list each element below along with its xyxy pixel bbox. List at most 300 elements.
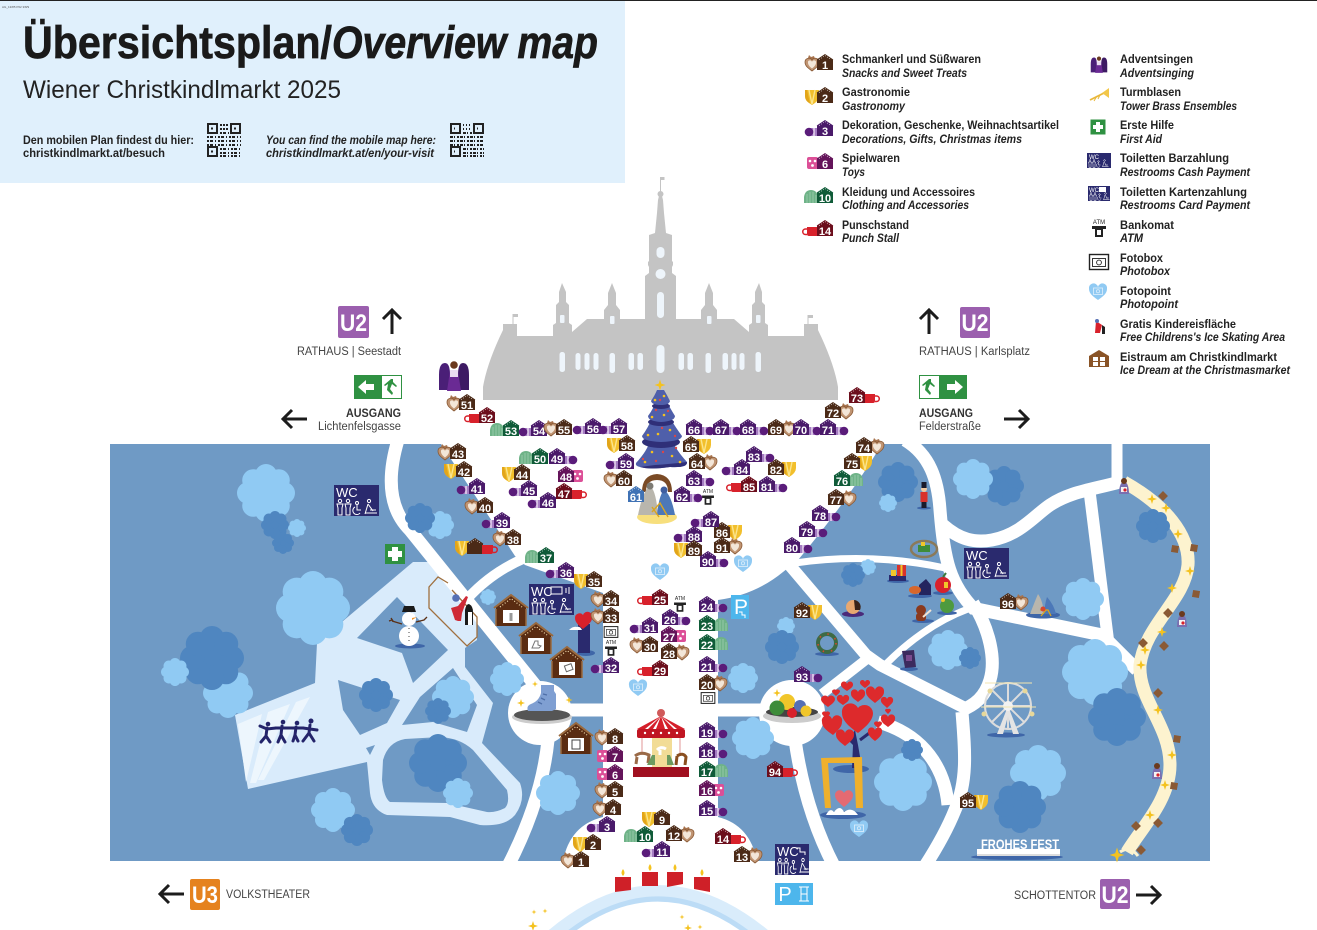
skaters silhouette bbox=[260, 718, 317, 742]
stall 37: 37 bbox=[540, 553, 552, 565]
stall 31: 31 bbox=[644, 623, 656, 635]
stall 51 bbox=[447, 394, 476, 412]
stall 13: 13 bbox=[736, 852, 748, 864]
stall 59: 59 bbox=[620, 459, 632, 471]
legend: services text: Adventsinging bbox=[1119, 68, 1194, 80]
stall 90: 90 bbox=[702, 557, 714, 569]
stars under arch bbox=[528, 908, 702, 930]
U2 right with direction bbox=[919, 307, 1030, 358]
legend: services text: Restrooms Card Payment bbox=[1120, 200, 1251, 212]
stall 34 bbox=[591, 590, 620, 608]
stall 36: 36 bbox=[560, 568, 572, 580]
teddy bear bbox=[912, 605, 934, 623]
stall 13 bbox=[733, 846, 762, 864]
Frohes Fest sign: FROHES FEST bbox=[981, 836, 1059, 852]
stall 83: 83 bbox=[748, 452, 760, 464]
exit right bbox=[919, 375, 1028, 433]
heart photo frame bbox=[820, 757, 866, 819]
stall 7 bbox=[597, 746, 624, 764]
stall 40: 40 bbox=[479, 503, 491, 515]
stall 84 bbox=[722, 459, 751, 477]
stall 94: 94 bbox=[769, 767, 782, 779]
legend: services text: Turmblasen bbox=[1120, 87, 1181, 99]
U2 Schottentor bottom right: SCHOTTENTOR bbox=[1014, 890, 1096, 902]
stall 52: 52 bbox=[481, 413, 493, 425]
light trail bbox=[1110, 478, 1200, 862]
WC sign right: WC bbox=[966, 548, 988, 563]
legend: category icons: 3 bbox=[822, 126, 828, 138]
stall 24 bbox=[698, 596, 727, 614]
icon: atm bbox=[1092, 220, 1106, 237]
stall 46: 46 bbox=[542, 498, 554, 510]
heart tree bbox=[821, 680, 895, 773]
stall 32 bbox=[591, 657, 620, 675]
stall 67 bbox=[712, 419, 741, 437]
small map attractions bbox=[815, 482, 1060, 671]
stall 22: 22 bbox=[701, 640, 713, 652]
ornament bowl monument bbox=[763, 689, 821, 723]
U3 Volkstheater bottom left bbox=[160, 879, 310, 910]
ice and snow area bbox=[235, 562, 522, 825]
title: Übersichtsplan/ bbox=[23, 17, 332, 68]
legend: service icons bbox=[1087, 57, 1111, 367]
green ornament bbox=[937, 598, 957, 615]
stall 33: 33 bbox=[605, 613, 617, 625]
stall 60 bbox=[604, 470, 633, 488]
wreath bbox=[815, 634, 839, 656]
stall 73: 73 bbox=[851, 393, 863, 405]
toy house bbox=[908, 579, 932, 598]
stall 81: 81 bbox=[761, 482, 773, 494]
stall 34: 34 bbox=[605, 596, 618, 608]
stall 73 bbox=[848, 387, 879, 405]
WC sign left bbox=[334, 485, 379, 516]
stall 71: 71 bbox=[822, 425, 834, 437]
heart on pillar bbox=[569, 612, 595, 656]
WC sign bottom bbox=[775, 844, 809, 875]
skate monument bbox=[512, 681, 572, 724]
stall 57 bbox=[599, 418, 628, 436]
city hall silhouette bbox=[483, 177, 838, 400]
stall 68 bbox=[739, 419, 768, 437]
exit left: AUSGANG bbox=[346, 406, 401, 420]
stall 5 bbox=[595, 781, 624, 799]
icon: kids ice area bbox=[1095, 319, 1105, 334]
stall 17: 17 bbox=[701, 767, 713, 779]
stall 11 bbox=[642, 841, 671, 859]
stall 14 bbox=[714, 828, 745, 846]
legend: services text: Toiletten Barzahlung bbox=[1120, 153, 1229, 165]
stall 20 bbox=[698, 674, 727, 692]
stall 28 bbox=[660, 643, 689, 661]
stall 74: 74 bbox=[858, 443, 871, 455]
arrow up bbox=[920, 310, 938, 334]
lawn lower left bbox=[338, 680, 400, 735]
parking stairs sign: P bbox=[734, 596, 748, 619]
ice dream huts bbox=[494, 595, 593, 754]
parking lift sign: P bbox=[778, 884, 792, 906]
stall 64: 64 bbox=[691, 459, 704, 471]
stall 1 bbox=[561, 851, 590, 869]
stall 8: 8 bbox=[612, 734, 618, 746]
legend: services text: Gratis Kindereisfläche bbox=[1120, 319, 1236, 331]
WC sign right bbox=[964, 548, 1009, 579]
ATMs on map: ATM bbox=[675, 596, 685, 602]
stall 66 bbox=[685, 419, 714, 437]
stall 51: 51 bbox=[461, 400, 473, 412]
legend: services text: First Aid bbox=[1120, 134, 1163, 146]
title: Overview map bbox=[332, 17, 598, 68]
kids ice fence with child and penguin bbox=[429, 577, 477, 646]
nutcracker bbox=[917, 482, 931, 510]
stall 69 bbox=[767, 419, 796, 437]
snowman bbox=[389, 606, 427, 648]
legend: category icons: 14 bbox=[819, 226, 832, 238]
U3 Volkstheater bottom left: VOLKSTHEATER bbox=[226, 889, 310, 901]
stall 37 bbox=[525, 547, 555, 565]
ATMs on map: ATM bbox=[703, 489, 713, 495]
stall 30 bbox=[630, 636, 659, 654]
icon: ice dream hut bbox=[1089, 350, 1109, 367]
legend: services text: Photobox bbox=[1120, 266, 1171, 278]
arrow up bbox=[383, 310, 401, 334]
stall 78: 78 bbox=[814, 511, 826, 523]
stall 71 bbox=[819, 419, 848, 437]
legend: stall categories: Spielwaren bbox=[842, 153, 900, 165]
stall 94 bbox=[766, 761, 797, 779]
stall 66: 66 bbox=[688, 425, 700, 437]
U2 right with direction: U2 bbox=[962, 310, 988, 337]
legend: category icons: 6 bbox=[822, 159, 828, 171]
stall 29 bbox=[638, 660, 669, 678]
white paths bbox=[391, 440, 1137, 866]
stall 50 bbox=[519, 448, 549, 466]
stall 55: 55 bbox=[558, 425, 570, 437]
stall 24: 24 bbox=[701, 602, 714, 614]
stall 81 bbox=[758, 476, 787, 494]
stall 67: 67 bbox=[715, 425, 727, 437]
stall 23: 23 bbox=[701, 621, 713, 633]
stall 48 bbox=[557, 466, 583, 484]
stall 55 bbox=[544, 419, 573, 437]
stall 80: 80 bbox=[786, 543, 798, 555]
stall 18 bbox=[698, 742, 727, 760]
legend: category icons: 2 bbox=[822, 93, 828, 105]
stall 54 bbox=[519, 420, 548, 438]
stall 36 bbox=[546, 562, 575, 580]
stall 5: 5 bbox=[612, 787, 618, 799]
stall 63: 63 bbox=[688, 476, 700, 488]
stall 18: 18 bbox=[701, 748, 713, 760]
stall 6 bbox=[597, 764, 624, 782]
stall 95 bbox=[959, 792, 988, 810]
market stalls bbox=[438, 387, 1028, 869]
subtitle: Wiener Christkindlmarkt 2025 bbox=[23, 76, 341, 104]
icon: photobox bbox=[1090, 254, 1108, 270]
stall 70 bbox=[792, 419, 821, 437]
stall 62: 62 bbox=[676, 492, 688, 504]
legend: stall categories: Gastronomie bbox=[842, 87, 910, 99]
stall 63 bbox=[685, 470, 714, 488]
English QR caption bbox=[266, 135, 436, 160]
stall 47: 47 bbox=[558, 489, 570, 501]
QR code German bbox=[207, 124, 241, 156]
stall 12 bbox=[665, 825, 694, 843]
stall 47 bbox=[555, 483, 586, 501]
advent candles bbox=[615, 864, 710, 892]
stall 12: 12 bbox=[668, 831, 680, 843]
stall 49: 49 bbox=[551, 454, 563, 466]
exit right: Felderstraße bbox=[919, 421, 981, 433]
stall 14: 14 bbox=[717, 834, 730, 846]
snow arch bbox=[528, 893, 772, 930]
stall 77 bbox=[827, 489, 856, 507]
legend: services text: Photopoint bbox=[1120, 299, 1179, 311]
stall 96 bbox=[999, 593, 1028, 611]
stall 87 bbox=[691, 511, 720, 529]
legend: services text: Erste Hilfe bbox=[1120, 120, 1174, 132]
stall 75 bbox=[843, 453, 872, 471]
stall 43: 43 bbox=[452, 449, 464, 461]
stall 15: 15 bbox=[701, 806, 713, 818]
stall 2 bbox=[573, 834, 602, 852]
title bbox=[23, 17, 598, 68]
legend: stall categories: Decorations, Gifts, Christmas items bbox=[842, 134, 1022, 146]
legend: services text: ATM bbox=[1119, 233, 1143, 245]
icon: restrooms cash: WC bbox=[1089, 155, 1100, 161]
icon: restrooms card bbox=[1088, 186, 1110, 201]
WC sign card block bbox=[529, 584, 574, 615]
stall 41: 41 bbox=[471, 484, 483, 496]
stall 28: 28 bbox=[663, 649, 675, 661]
stall 76: 76 bbox=[836, 476, 848, 488]
stall 42: 42 bbox=[458, 467, 470, 479]
stall 4 bbox=[593, 799, 622, 817]
comet bbox=[1110, 848, 1138, 862]
trees bbox=[161, 459, 1170, 846]
stall 10: 10 bbox=[639, 832, 651, 844]
stall 48: 48 bbox=[560, 472, 572, 484]
stall 10 bbox=[624, 826, 654, 844]
stall 50: 50 bbox=[534, 454, 546, 466]
apple bbox=[933, 573, 953, 595]
legend: services text: Eistraum am Christkindlmarkt bbox=[1120, 352, 1277, 364]
stall 79 bbox=[798, 521, 827, 539]
German QR caption: Den mobilen Plan findest du hier: bbox=[23, 135, 194, 147]
stall 8 bbox=[595, 728, 624, 746]
exit right: AUSGANG bbox=[919, 406, 973, 420]
stall 26: 26 bbox=[664, 615, 676, 627]
icon: atm: ATM bbox=[1093, 220, 1105, 226]
stall 26 bbox=[661, 609, 690, 627]
English QR caption: christkindlmarkt.at/en/your-visit bbox=[266, 148, 435, 160]
stall 4: 4 bbox=[610, 805, 617, 817]
German QR caption bbox=[23, 135, 194, 160]
skating rink highlights bbox=[238, 697, 310, 783]
arrow left bbox=[283, 410, 307, 428]
U2 left with direction: U2 bbox=[340, 310, 367, 337]
ATMs on map: ATM bbox=[606, 640, 616, 646]
stall 52 bbox=[465, 407, 496, 425]
stall 58: 58 bbox=[621, 441, 633, 453]
stall 56: 56 bbox=[587, 424, 599, 436]
stall 9 bbox=[642, 809, 671, 827]
stall 88: 88 bbox=[688, 532, 700, 544]
stall 23 bbox=[698, 615, 728, 633]
stall 19: 19 bbox=[701, 728, 713, 740]
stall 90 bbox=[699, 551, 728, 569]
photopoints bbox=[629, 555, 868, 837]
stall 21 bbox=[698, 656, 727, 674]
lawn centre bbox=[402, 668, 477, 732]
parking lift sign bbox=[775, 883, 813, 906]
stall 95: 95 bbox=[962, 798, 974, 810]
legend: stall categories: Punch Stall bbox=[842, 233, 900, 245]
stall 84: 84 bbox=[736, 465, 749, 477]
stall 15 bbox=[698, 800, 727, 818]
stall 56 bbox=[573, 418, 602, 436]
legend: services text: Restrooms Cash Payment bbox=[1120, 167, 1251, 179]
stall 93 bbox=[793, 666, 822, 684]
stall 96: 96 bbox=[1002, 599, 1014, 611]
legend: category icons: 10 bbox=[819, 193, 831, 205]
stall 85: 85 bbox=[743, 482, 755, 494]
legend: services text bbox=[1119, 54, 1291, 377]
stall 91: 91 bbox=[716, 543, 728, 555]
stall 49 bbox=[548, 448, 577, 466]
legend: stall categories: Punschstand bbox=[842, 220, 909, 232]
carousel bbox=[633, 709, 689, 777]
stall 30: 30 bbox=[644, 642, 656, 654]
stall nativity bbox=[1026, 594, 1060, 618]
English QR caption: You can find the mobile map here: bbox=[266, 135, 436, 147]
U2 left with direction bbox=[297, 306, 402, 358]
legend: stall categories: Kleidung und Accessoires bbox=[842, 187, 975, 199]
stall 92 bbox=[793, 602, 822, 620]
legend: services text: Fotobox bbox=[1120, 253, 1164, 265]
stall 17 bbox=[698, 761, 728, 779]
stall unnumbered gastro punch bbox=[455, 538, 497, 556]
legend: services text: Toiletten Kartenzahlung bbox=[1120, 187, 1247, 199]
stall 16 bbox=[698, 780, 724, 798]
adventsingen choir bbox=[439, 361, 469, 391]
stall 2: 2 bbox=[590, 840, 596, 852]
stall 75: 75 bbox=[846, 459, 858, 471]
stall 33 bbox=[591, 607, 620, 625]
stall 41 bbox=[457, 478, 486, 496]
legend: stall categories bbox=[842, 54, 1059, 245]
stall 53: 53 bbox=[505, 426, 517, 438]
stall 86 bbox=[713, 522, 742, 540]
stall 77: 77 bbox=[830, 495, 842, 507]
legend: stall categories: Snacks and Sweet Treats bbox=[842, 68, 967, 80]
stall 60: 60 bbox=[618, 476, 630, 488]
stall 39: 39 bbox=[496, 518, 508, 530]
stall 74 bbox=[855, 437, 884, 455]
legend: services text: Ice Dream at the Christmasmarket bbox=[1120, 365, 1291, 377]
book bbox=[900, 650, 918, 671]
nativity scene bbox=[637, 474, 677, 524]
stall 80 bbox=[783, 537, 812, 555]
legend: services text: Adventsingen bbox=[1120, 54, 1193, 66]
stall 57: 57 bbox=[613, 424, 625, 436]
stall 25 bbox=[638, 589, 669, 607]
header panel bbox=[0, 1, 625, 183]
snowman lawn bbox=[357, 597, 448, 683]
stall 1: 1 bbox=[578, 857, 584, 869]
icon: restrooms cash bbox=[1087, 153, 1111, 168]
stall 88 bbox=[674, 526, 703, 544]
German QR caption: christkindlmarkt.at/besuch bbox=[23, 148, 165, 160]
stall 91 bbox=[713, 537, 742, 555]
stall 93: 93 bbox=[796, 672, 808, 684]
stall 72 bbox=[824, 402, 853, 420]
stall 39 bbox=[482, 512, 511, 530]
stall 42 bbox=[444, 461, 473, 479]
photoboxes on map bbox=[604, 627, 715, 703]
icon: first aid bbox=[1090, 120, 1106, 134]
stall 53 bbox=[490, 420, 520, 438]
icon: trumpet bbox=[1090, 88, 1109, 101]
stall 45 bbox=[509, 480, 538, 498]
stall 44: 44 bbox=[516, 470, 529, 482]
stall 44 bbox=[502, 464, 531, 482]
exit left bbox=[283, 375, 402, 433]
toy train bbox=[911, 541, 937, 557]
icon: photopoint bbox=[1089, 283, 1107, 300]
stall 70: 70 bbox=[795, 425, 807, 437]
stall 82 bbox=[767, 459, 796, 477]
ATMs on map bbox=[605, 489, 714, 656]
stall 82: 82 bbox=[770, 465, 782, 477]
first aid station bbox=[385, 544, 405, 564]
legend: services text: Fotopoint bbox=[1120, 286, 1171, 298]
stall 32: 32 bbox=[605, 663, 617, 675]
stall 79: 79 bbox=[801, 527, 813, 539]
stall 68: 68 bbox=[742, 425, 754, 437]
exit left: Lichtenfelsgasse bbox=[318, 421, 401, 433]
legend: stall categories: Toys bbox=[842, 167, 865, 179]
stall 92: 92 bbox=[796, 608, 808, 620]
stall 40 bbox=[465, 497, 494, 515]
top border line bbox=[0, 0, 1317, 1]
stall 89 bbox=[674, 540, 703, 558]
legend: category icons: 1 bbox=[822, 60, 828, 72]
icon: restrooms card: WC bbox=[1089, 188, 1100, 194]
stall 16: 16 bbox=[701, 786, 713, 798]
stall 64 bbox=[688, 453, 717, 471]
stall 87: 87 bbox=[705, 517, 717, 529]
stall 78 bbox=[811, 505, 840, 523]
U3 Volkstheater bottom left: U3 bbox=[192, 882, 218, 909]
stall 62 bbox=[673, 486, 702, 504]
legend: category icons bbox=[803, 54, 834, 238]
stall 83 bbox=[745, 446, 774, 464]
stall 61: 61 bbox=[630, 492, 642, 504]
legend: stall categories: Gastronomy bbox=[842, 101, 906, 113]
Frohes Fest sign bbox=[971, 836, 1063, 860]
U2 Schottentor bottom right bbox=[1014, 879, 1160, 909]
map base bbox=[110, 444, 1210, 861]
stall 20: 20 bbox=[701, 680, 713, 692]
arrow right bbox=[1004, 410, 1028, 428]
legend: stall categories: Schmankerl und Süßwaren bbox=[842, 54, 981, 66]
stall 46 bbox=[528, 492, 557, 510]
stall 9: 9 bbox=[659, 815, 665, 827]
stall 85 bbox=[727, 476, 758, 494]
stall 11: 11 bbox=[656, 847, 668, 859]
stall 29: 29 bbox=[654, 666, 666, 678]
